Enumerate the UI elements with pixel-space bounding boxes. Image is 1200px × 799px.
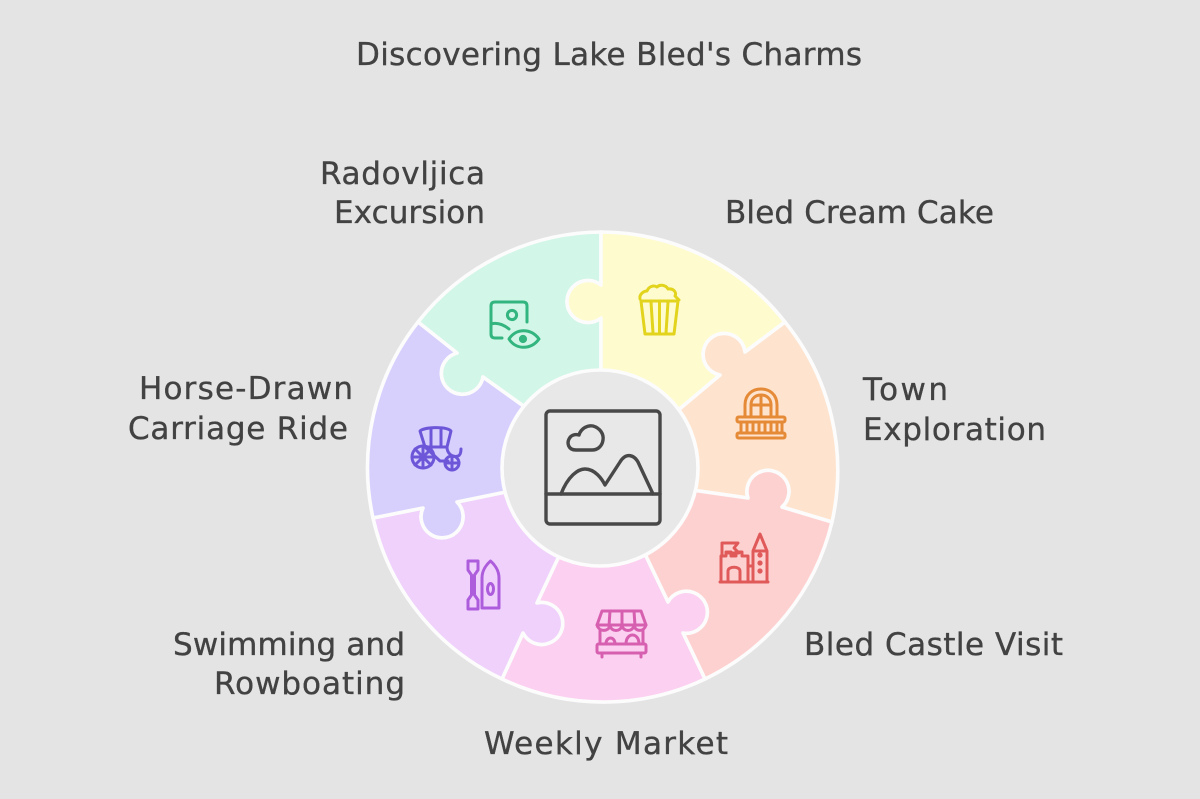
panel: center circle — [502, 370, 698, 566]
icon: picture with eye — [491, 302, 539, 347]
label: Horse-Drawn Carriage Ride: Carriage Ride — [128, 411, 348, 447]
panel: Horse-Drawn Carriage Ride piece — [368, 322, 529, 538]
panel: Bled Castle Visit piece — [644, 470, 832, 679]
label: Bled Castle Visit: Bled Castle Visit — [804, 627, 1063, 663]
label: Swimming and Rowboating: Swimming and — [173, 627, 405, 663]
icon: balcony — [737, 389, 785, 438]
panel: Radovljica Excursion piece — [418, 232, 601, 410]
label: Town Exploration: Town — [862, 372, 948, 408]
label: Radovljica Excursion: Excursion — [334, 195, 485, 231]
label: Swimming and Rowboating: Rowboating — [214, 666, 405, 702]
icon: paddle and boat — [468, 561, 499, 609]
icon: popcorn — [640, 285, 679, 334]
panel: Weekly Market piece — [502, 551, 707, 702]
panel: Swimming and Rowboating piece — [373, 490, 563, 679]
label: Town Exploration: Exploration — [863, 412, 1046, 448]
label: Swimming and Rowboating — [173, 627, 405, 702]
label: Bled Cream Cake: Bled Cream Cake — [725, 195, 994, 231]
puzzle wheel — [368, 232, 838, 702]
title: Discovering Lake Bled's Charms — [356, 37, 862, 73]
panel: Bled Cream Cake piece — [567, 232, 785, 412]
label: Horse-Drawn Carriage Ride: Horse-Drawn — [139, 371, 353, 407]
label: Horse-Drawn Carriage Ride — [128, 371, 353, 447]
panel: Town Exploration piece — [676, 322, 838, 522]
label: Town Exploration — [862, 372, 1046, 448]
label: Weekly Market: Weekly Market — [484, 726, 728, 762]
icon: horse-drawn carriage — [412, 428, 461, 470]
icon: market stall — [597, 611, 646, 657]
icon: landscape picture — [546, 411, 660, 524]
label: Radovljica Excursion — [320, 156, 485, 231]
icon: castle — [720, 534, 768, 582]
label: Radovljica Excursion: Radovljica — [320, 156, 485, 192]
